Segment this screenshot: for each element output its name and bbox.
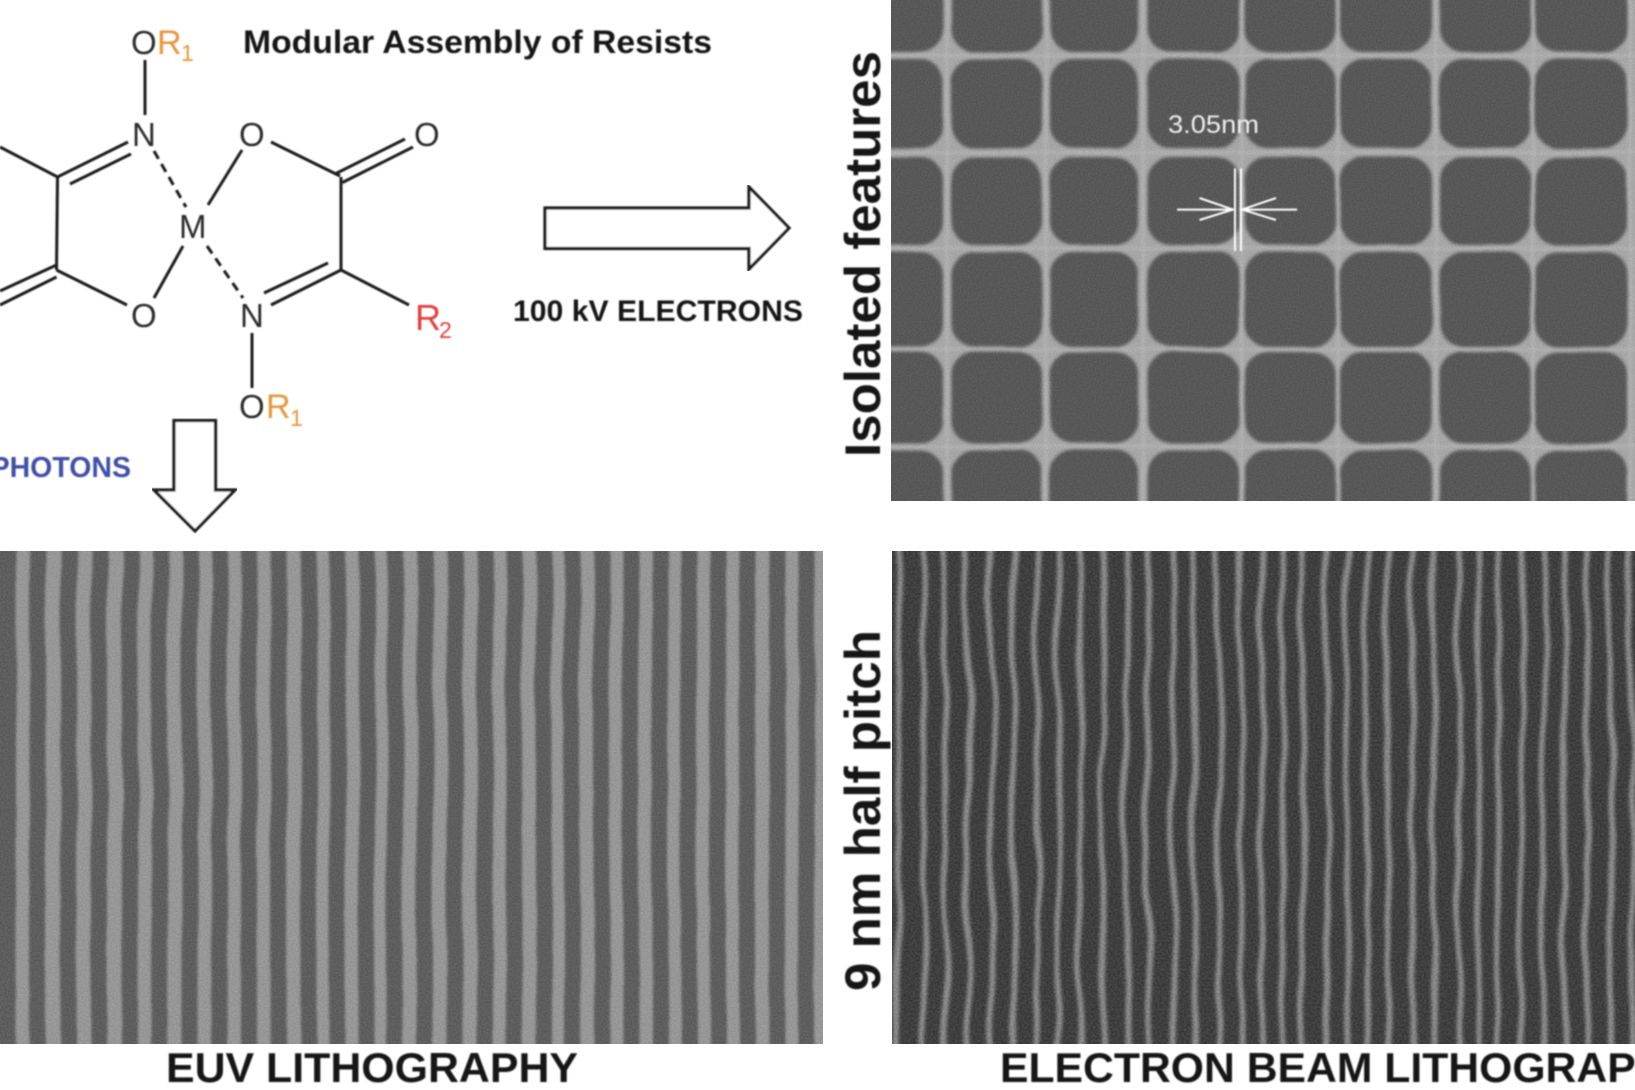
arrow: right to electron beam [545, 187, 789, 269]
atom labels: 1 [181, 40, 194, 66]
heading: Modular Assembly of Resists: Modular Assembly of Resists [243, 24, 712, 60]
atom labels: O [131, 297, 157, 334]
arrow: down to EUV lithography [154, 420, 235, 531]
axis label: 9 nm half pitch: 9 nm half pitch [835, 630, 891, 991]
label: 100 kV electrons: 100 kV ELECTRONS [513, 295, 803, 328]
atom labels: 2 [439, 317, 452, 343]
measurement value: 3.05nm [1168, 111, 1259, 139]
bonds [0, 60, 413, 388]
atom labels: O [131, 24, 157, 61]
chemical structure: metal complex [0, 24, 452, 431]
atom labels: R [415, 297, 441, 338]
atom labels: O [239, 388, 265, 425]
atom labels [131, 24, 452, 431]
atom labels: R [157, 24, 182, 62]
measurement arrows [1177, 168, 1297, 251]
panel: EUV lithography micrograph [0, 530, 850, 1060]
axis label: Isolated features: Isolated features [835, 51, 891, 457]
atom labels: 1 [290, 405, 303, 431]
atom labels: N [240, 297, 264, 334]
atom labels: O [239, 116, 265, 153]
panel: isolated features micrograph [891, 0, 1635, 501]
caption: EUV lithography: EUV LITHOGRAPHY [166, 1044, 578, 1090]
atom labels: N [132, 116, 156, 153]
atom labels: M [179, 208, 206, 245]
panel: electron beam lithography micrograph [870, 530, 1635, 1060]
atom labels: O [414, 116, 440, 153]
atom labels: R [266, 388, 291, 426]
measurement callout: 3.05 nm [1168, 111, 1297, 251]
